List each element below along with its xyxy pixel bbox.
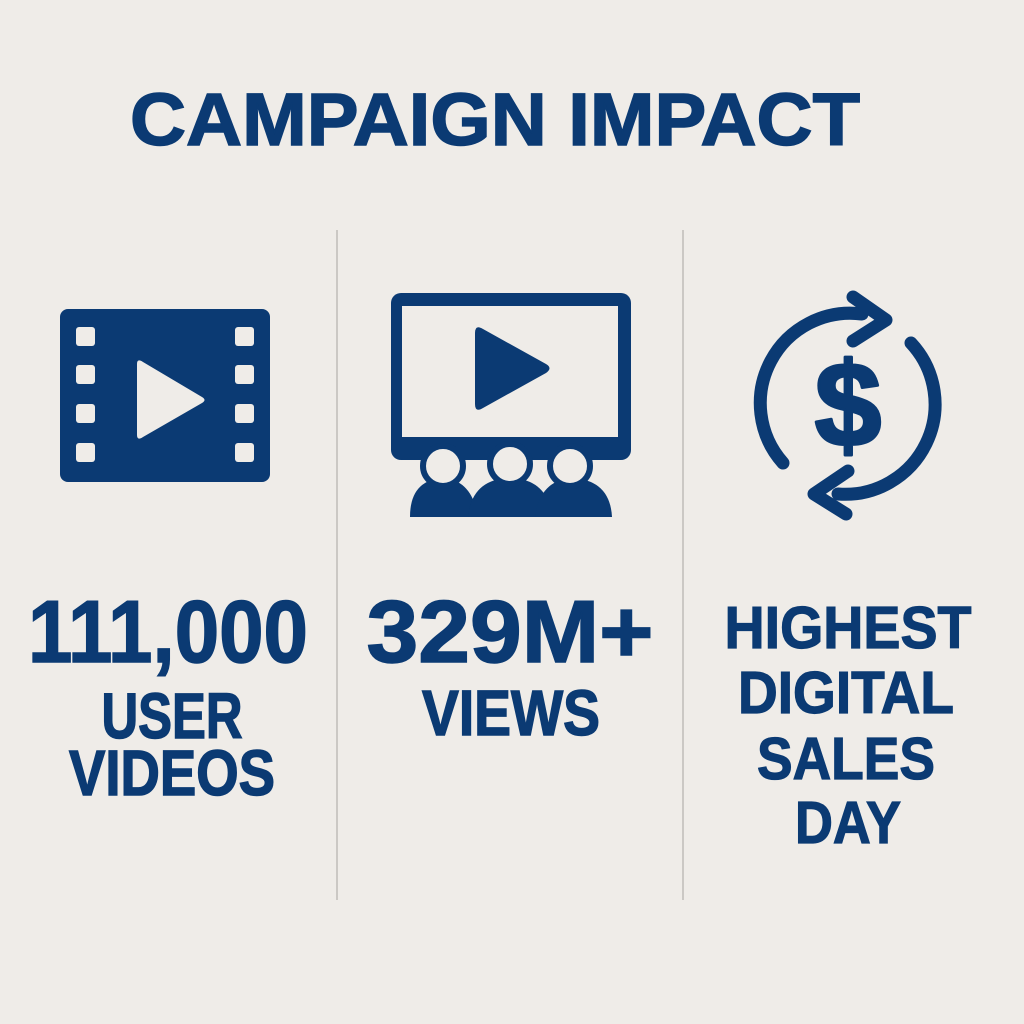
icon: screen with audience bbox=[391, 293, 631, 517]
panel: views bbox=[366, 293, 654, 749]
icon: dollar cycle bbox=[760, 297, 935, 514]
icon: dollar cycle: $ bbox=[815, 338, 881, 472]
panel: user videos bbox=[28, 309, 308, 809]
stat: highest digital sales day bbox=[724, 595, 972, 856]
stat: 111,000 user videos: VIDEOS bbox=[69, 737, 275, 809]
stat: 329M+ views: VIEWS bbox=[422, 677, 600, 749]
stat: highest digital sales day: SALES bbox=[757, 726, 935, 792]
stat: highest digital sales day: HIGHEST bbox=[724, 595, 972, 661]
stat: 329M+ views: 329M+ bbox=[366, 582, 654, 681]
stat: 111,000 user videos bbox=[28, 582, 308, 809]
stat: 329M+ views bbox=[366, 582, 654, 749]
stat: 111,000 user videos: 111,000 bbox=[28, 582, 308, 681]
stat: highest digital sales day: DAY bbox=[795, 790, 901, 856]
icon: film strip bbox=[60, 309, 270, 482]
stat: highest digital sales day: DIGITAL bbox=[738, 660, 954, 726]
stat: 111,000 user videos: USER bbox=[102, 680, 242, 752]
title: CAMPAIGN IMPACT bbox=[130, 78, 860, 161]
panel: sales bbox=[724, 297, 972, 856]
